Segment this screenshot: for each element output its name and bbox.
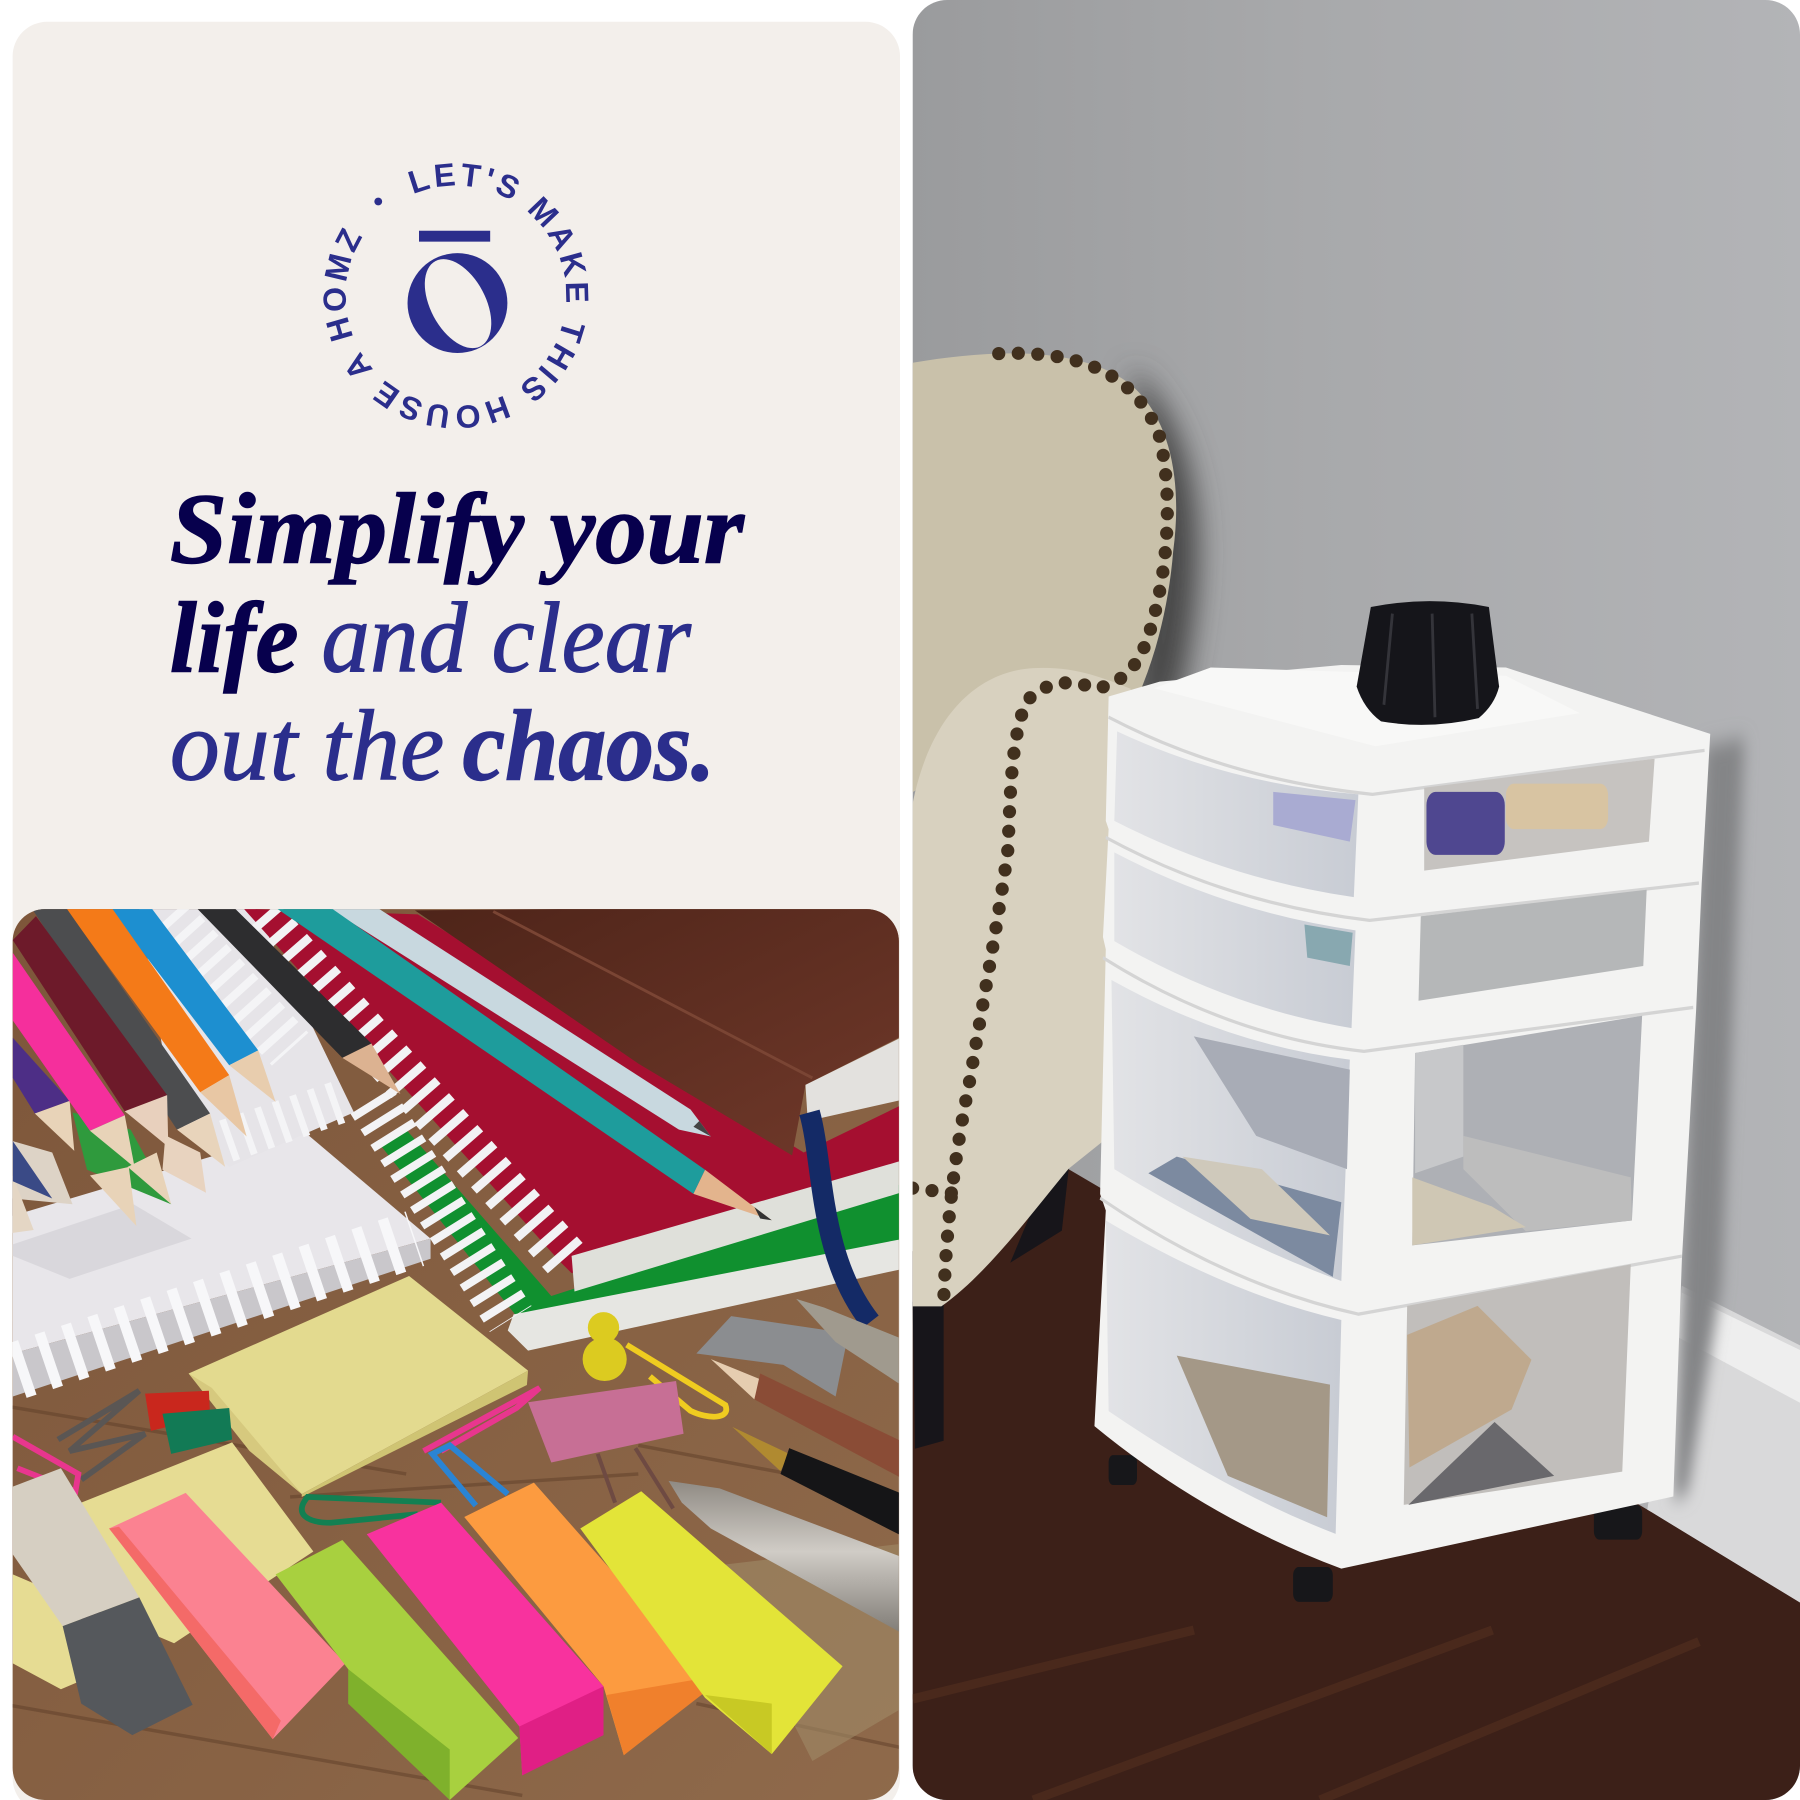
window 3 contents xyxy=(1412,1045,1632,1245)
baseboard xyxy=(1647,1286,1800,1603)
blue pencil xyxy=(107,906,276,1102)
page flag: magenta xyxy=(367,1503,604,1775)
drawer 1 contents xyxy=(1273,792,1356,842)
wall xyxy=(913,0,1800,1800)
window 4 xyxy=(1404,1264,1631,1505)
cart shadow xyxy=(1673,738,1744,1501)
logo circular slogan: LET'S MAKE THIS HOUSE A HOMZ xyxy=(323,163,588,428)
armchair xyxy=(913,353,1176,1449)
page flag: pink xyxy=(109,1493,345,1739)
headline: life xyxy=(170,582,298,694)
white pen xyxy=(325,906,711,1136)
logo letter o xyxy=(408,248,507,359)
navy ribbon xyxy=(810,1112,870,1322)
headline: out the xyxy=(170,689,444,801)
chair shadow xyxy=(1131,367,1198,735)
second yellow sticky xyxy=(13,1442,313,1689)
chair back xyxy=(913,353,1176,792)
red notebook xyxy=(244,909,910,1291)
panel: cream left card xyxy=(13,22,900,1800)
gold reflection xyxy=(1506,784,1608,829)
cart white frame xyxy=(1094,665,1710,1569)
brown hardcover notebook xyxy=(415,906,910,1155)
logo macron bar xyxy=(419,231,490,242)
coloured pencils bundle xyxy=(13,906,276,1233)
pink binder clip xyxy=(528,1381,684,1508)
cart wheels xyxy=(1109,1455,1642,1602)
purple pencil xyxy=(13,1038,74,1151)
headline xyxy=(170,472,746,801)
grey pencil xyxy=(32,909,225,1167)
silver pen top xyxy=(796,1299,899,1384)
maroon pencil xyxy=(13,916,168,1147)
headline: and clear xyxy=(321,582,692,694)
chair nail studs xyxy=(913,353,1167,1303)
teal pencil xyxy=(273,906,772,1220)
orange pencil xyxy=(64,906,247,1136)
logo separator dot xyxy=(374,198,382,205)
chair arm xyxy=(913,668,1131,1306)
window 1 xyxy=(1424,759,1655,871)
eraser xyxy=(13,1468,193,1735)
drawer 1 xyxy=(1114,731,1358,897)
paper clips xyxy=(13,1345,726,1523)
green notebook xyxy=(371,1101,910,1351)
small tips xyxy=(13,1112,206,1233)
silver pen xyxy=(668,1481,910,1638)
page flag: orange xyxy=(464,1483,706,1755)
yellow sticky pad xyxy=(189,1276,528,1497)
drawer 2 xyxy=(1114,852,1356,1028)
headline: chaos. xyxy=(463,689,715,801)
page flag: green xyxy=(276,1540,518,1800)
panel: stationery photo xyxy=(0,900,910,1800)
window 3 xyxy=(1412,1016,1642,1245)
back white notebook xyxy=(139,909,354,1167)
black jar on top xyxy=(1357,601,1499,725)
dark pencil xyxy=(194,906,400,1094)
floor xyxy=(913,1169,1800,1800)
window 2 xyxy=(1419,890,1647,1001)
drawer 4 contents xyxy=(1177,1356,1330,1517)
white spiral notebook xyxy=(13,1130,431,1396)
pencil sharpener xyxy=(696,1316,848,1396)
black pen xyxy=(732,1427,899,1534)
chair legs xyxy=(913,1169,1069,1449)
cart top shading xyxy=(1154,668,1580,746)
left drawers xyxy=(1106,731,1358,1534)
cart lip lines xyxy=(1100,717,1705,1314)
drawer 2 contents xyxy=(1304,925,1353,966)
push pins xyxy=(145,1312,627,1454)
page flag: yellow xyxy=(580,1491,843,1754)
pink pencil xyxy=(13,953,135,1167)
drawer 4 xyxy=(1106,1220,1341,1534)
logo badge xyxy=(323,163,588,428)
drawer 3 xyxy=(1111,980,1350,1281)
brown pencil xyxy=(711,1359,910,1483)
window 4 contents xyxy=(1407,1306,1554,1505)
purple item xyxy=(1426,792,1505,855)
right windows xyxy=(1404,759,1655,1505)
wooden desk xyxy=(0,900,910,1800)
panel: storage cart photo xyxy=(913,0,1800,1800)
headline: Simplify your xyxy=(170,473,746,585)
drawer 3 contents xyxy=(1148,1036,1350,1277)
